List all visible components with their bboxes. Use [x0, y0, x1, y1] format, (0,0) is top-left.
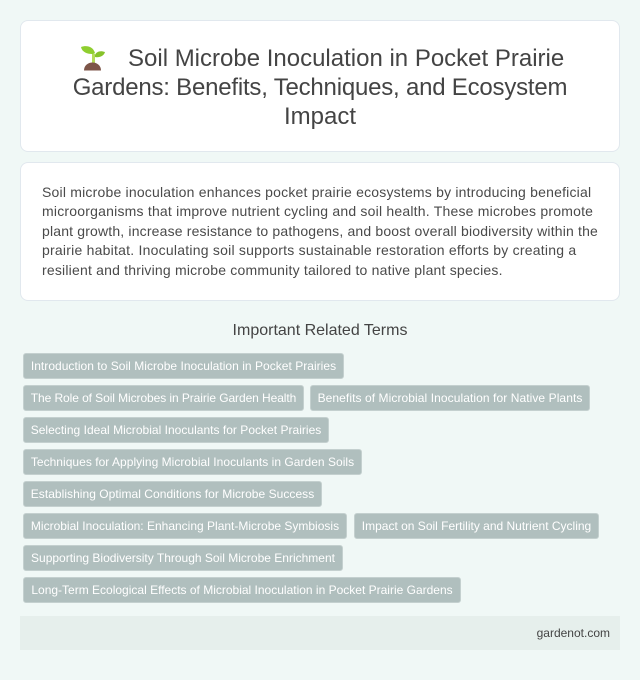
- tag: Supporting Biodiversity Through Soil Microbe Enrichment: [31, 551, 335, 565]
- summary text: microorganisms that improve nutrient cycling and soil health. These microbes promote: [42, 203, 593, 219]
- tag: Introduction to Soil Microbe Inoculation in Pocket Prairies: [31, 359, 336, 373]
- title: Impact: [284, 103, 356, 130]
- tag: [310, 385, 590, 411]
- tag: Long-Term Ecological Effects of Microbial Inoculation in Pocket Prairie Gardens: [31, 583, 453, 597]
- tag: [23, 513, 347, 539]
- panel: summary card: [20, 162, 620, 301]
- tag: [23, 481, 322, 507]
- title: [73, 45, 567, 130]
- summary text: plant growth, increase resistance to pathogens, and boost overall biodiversity within the: [42, 223, 598, 239]
- tag: [23, 353, 344, 379]
- title: Soil Microbe Inoculation in Pocket Prairie: [128, 45, 564, 72]
- tag: [354, 513, 599, 539]
- footer: source: gardenot.com: [537, 626, 610, 640]
- panel: term tags: [23, 353, 599, 603]
- icon: seedling: [81, 46, 105, 70]
- tag: [23, 577, 461, 603]
- summary text: prairie habitat. Inoculating soil supports sustainable restoration efforts by creating a: [42, 242, 576, 258]
- tag: Techniques for Applying Microbial Inoculants in Garden Soils: [31, 455, 354, 469]
- tag: The Role of Soil Microbes in Prairie Garden Health: [31, 391, 296, 405]
- title: Gardens: Benefits, Techniques, and Ecosystem: [73, 74, 567, 101]
- summary text: resilient and thriving microbe community tailored to native plant species.: [42, 262, 503, 278]
- tag: Establishing Optimal Conditions for Microbe Success: [31, 487, 314, 501]
- footer: source: [20, 616, 620, 650]
- heading: related terms: Important Related Terms: [233, 322, 407, 339]
- tag: [23, 385, 304, 411]
- tag: Selecting Ideal Microbial Inoculants for Pocket Prairies: [31, 423, 321, 437]
- summary text: [42, 184, 598, 278]
- tag: Benefits of Microbial Inoculation for Native Plants: [318, 391, 582, 405]
- tag: [23, 449, 362, 475]
- tag: [23, 417, 329, 443]
- summary text: Soil microbe inoculation enhances pocket prairie ecosystems by introducing beneficial: [42, 184, 591, 200]
- tag: Impact on Soil Fertility and Nutrient Cycling: [362, 519, 591, 533]
- panel: title card: [20, 20, 620, 152]
- tag: Microbial Inoculation: Enhancing Plant-Microbe Symbiosis: [31, 519, 339, 533]
- tag: [23, 545, 343, 571]
